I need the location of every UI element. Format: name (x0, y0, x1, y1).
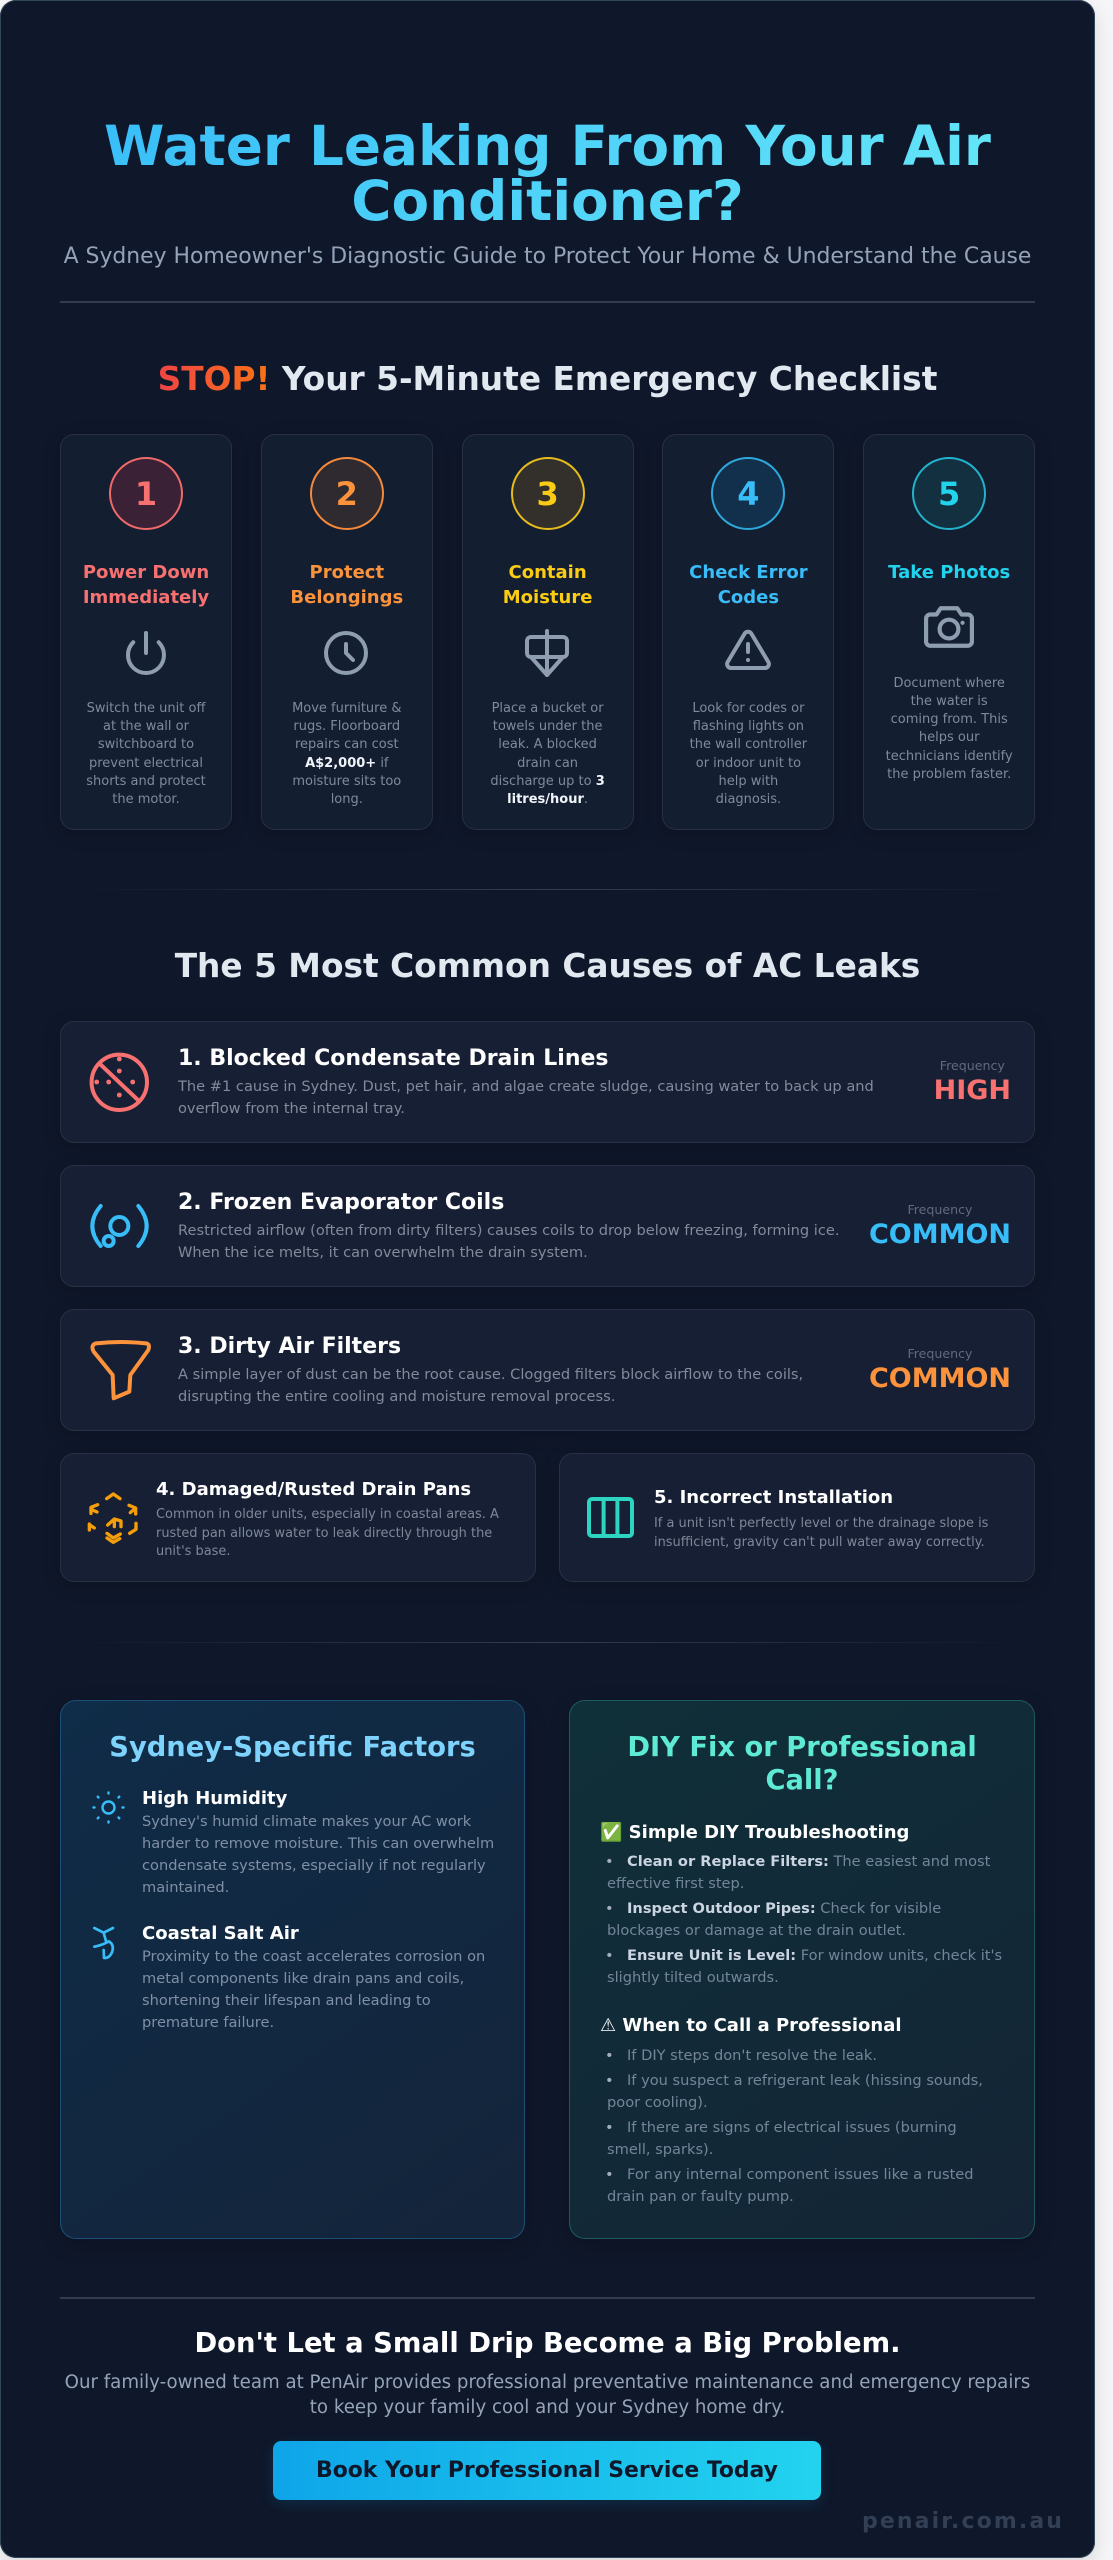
step title: Protect (310, 562, 384, 583)
professional list: • (605, 2072, 614, 2088)
heading: common causes: The 5 Most Common Causes of AC Leaks (175, 947, 920, 985)
cause text (654, 1516, 988, 1550)
step text: diagnosis. (716, 792, 781, 807)
cause text: Restricted airflow (often from dirty filters) causes coils to drop below freezing, forming ice. (178, 1222, 839, 1239)
step text: switchboard to (98, 737, 194, 752)
icon: clock (324, 631, 368, 675)
factor text: condensate systems, especially if not regularly (142, 1857, 486, 1874)
frequency badge (934, 1058, 1011, 1106)
cause text (156, 1507, 499, 1559)
title: Water Leaking From Your Air (104, 114, 991, 178)
step text: long. (331, 792, 363, 807)
step text: the wall controller (690, 737, 807, 752)
panel: Sydney-specific factors (60, 1700, 525, 2239)
icon: warning triangle (725, 630, 771, 670)
step text: leak. A blocked (498, 737, 597, 752)
step text: Place a bucket or (492, 701, 604, 716)
panel: step 2 protect belongings (261, 434, 433, 830)
factor text (142, 1948, 485, 2031)
subtitle: A Sydney Homeowner's Diagnostic Guide to Protect Your Home & Understand the Cause (64, 244, 1031, 269)
panel heading: Sydney-Specific Factors (109, 1732, 476, 1763)
step text: prevent electrical (89, 756, 203, 771)
frequency badge: COMMON (869, 1219, 1011, 1250)
panel: cause 4 drain pans (60, 1453, 536, 1582)
step text: Switch the unit off (87, 701, 205, 716)
panel: step 4 check error codes (662, 434, 834, 830)
panel: step 5 take photos (863, 434, 1035, 830)
step text (490, 701, 605, 807)
icon: camera (924, 606, 974, 648)
factor text: Sydney's humid climate makes your AC work (142, 1813, 471, 1830)
frequency badge: HIGH (934, 1075, 1011, 1106)
frequency badge (869, 1346, 1011, 1394)
cause text (178, 1366, 803, 1405)
step text (690, 701, 808, 807)
cause text: The #1 cause in Sydney. Dust, pet hair, and algae create sludge, causing water to back up and (178, 1078, 874, 1095)
cause title: 5. Incorrect Installation (654, 1487, 893, 1508)
panel: cause 5 incorrect installation (559, 1453, 1035, 1582)
icon: columns (587, 1497, 634, 1538)
step text: Move furniture & (292, 701, 402, 716)
professional list: • (605, 2118, 614, 2136)
DIY subheading: ✅ Simple DIY Troubleshooting (600, 1822, 909, 1842)
step text: the problem faster. (887, 767, 1011, 782)
icon: power (126, 631, 166, 675)
footer text: to keep your family cool and your Sydney home dry. (310, 2397, 785, 2418)
step text (886, 676, 1013, 782)
step title: Immediately (83, 587, 209, 608)
professional list (605, 2046, 983, 2204)
step number 3 (511, 457, 585, 530)
DIY list: Inspect Outdoor Pipes: Check for visible (627, 1900, 941, 1917)
icon: rusted pan dashed hexagon (88, 1492, 138, 1544)
step text: coming from. This (891, 712, 1008, 727)
step title: Check Error (689, 562, 808, 583)
panel: cause 3 dirty filters (60, 1309, 1035, 1431)
step title (290, 562, 403, 608)
step title: Codes (718, 587, 779, 608)
step text: discharge up to 3 (490, 774, 605, 789)
step text: flashing lights on (693, 719, 804, 734)
professional list: • (605, 2046, 614, 2064)
factor text: harder to remove moisture. This can overwhelm (142, 1835, 494, 1852)
step number 5: 5 (938, 474, 960, 512)
step text: moisture sits too (292, 774, 401, 789)
step number 2: 2 (336, 474, 358, 512)
factor text (142, 1813, 494, 1896)
step text: helps our (919, 730, 979, 745)
heading: emergency checklist: STOP! Your 5-Minute Emergency Checklist (158, 360, 937, 398)
factor text: metal components like drain pans and coils, (142, 1970, 464, 1987)
professional list: smell, sparks). (607, 2140, 713, 2158)
step text: Look for codes or (692, 701, 804, 716)
factor text: maintained. (142, 1879, 229, 1896)
factor text: premature failure. (142, 2014, 274, 2031)
cause text: If a unit isn't perfectly level or the drainage slope is (654, 1516, 988, 1531)
DIY list: • (605, 1947, 614, 1964)
footer text: Our family-owned team at PenAir provides professional preventative maintenance and emergency repairs (65, 2372, 1030, 2392)
step text: litres/hour. (507, 792, 588, 807)
cause text: Common in older units, especially in coastal areas. A (156, 1507, 499, 1522)
step number 3: 3 (536, 474, 559, 512)
professional subheading: ⚠ When to Call a Professional (600, 2015, 902, 2036)
step text: repairs can cost (295, 737, 399, 752)
professional list: • (605, 2166, 614, 2182)
step number 1 (109, 457, 183, 530)
panel: step 1 power down (60, 434, 232, 830)
step title: Take Photos (888, 562, 1010, 583)
frequency badge: Frequency (907, 1346, 972, 1361)
step text: Document where (893, 676, 1005, 691)
panel: DIY fix or professional call (569, 1700, 1035, 2239)
cause text: disrupting the entire cooling and moisture removal process. (178, 1388, 615, 1405)
professional list: If you suspect a refrigerant leak (hissing sounds, (627, 2072, 983, 2088)
DIY list: blockages or damage at the drain outlet. (607, 1922, 906, 1939)
step text: shorts and protect (86, 774, 206, 789)
title (100, 118, 995, 228)
step title (83, 562, 209, 608)
step title: Contain (509, 562, 587, 583)
watermark url: penair.com.au (862, 2509, 1064, 2534)
step text (86, 701, 206, 807)
cause title: 3. Dirty Air Filters (178, 1334, 401, 1359)
cause text: overflow from the internal tray. (178, 1100, 405, 1117)
frequency badge: Frequency (940, 1058, 1005, 1073)
icon: frozen coil (90, 1204, 149, 1248)
step title: Moisture (503, 587, 592, 608)
factor title: High Humidity (142, 1788, 287, 1809)
professional list: poor cooling). (607, 2094, 708, 2110)
step text: help with (718, 774, 778, 789)
panel heading: DIY Fix or Professional (627, 1732, 977, 1763)
step text (292, 701, 402, 807)
cause text: A simple layer of dust can be the root cause. Clogged filters block airflow to the coils, (178, 1366, 803, 1383)
call to action button: Book Your Professional Service Today (316, 2458, 778, 2483)
factor text: shortening their lifespan and leading to (142, 1992, 431, 2009)
step text: the water is (911, 694, 988, 709)
professional list: If there are signs of electrical issues (burning (627, 2118, 957, 2136)
DIY list: • (605, 1853, 614, 1870)
icon: sun (92, 1791, 125, 1824)
professional list: For any internal component issues like a rusted (627, 2166, 974, 2182)
DIY list: slightly tilted outwards. (607, 1969, 779, 1986)
step title: Belongings (290, 587, 403, 608)
professional list: drain pan or faulty pump. (607, 2188, 794, 2204)
panel heading (627, 1732, 977, 1796)
step text: or indoor unit to (696, 756, 801, 771)
icon: bucket shield (525, 629, 569, 677)
step text: A$2,000+ if (305, 756, 389, 771)
cause text: unit's base. (156, 1544, 230, 1559)
cause title: 4. Damaged/Rusted Drain Pans (156, 1479, 471, 1500)
panel heading: Call? (765, 1765, 838, 1796)
step number 4: 4 (737, 474, 760, 512)
panel: step 3 contain moisture (462, 434, 634, 830)
step title: Power Down (83, 562, 209, 583)
DIY list (605, 1853, 1002, 1986)
cause text (178, 1222, 839, 1261)
footer heading: Don't Let a Small Drip Become a Big Problem. (194, 2328, 901, 2359)
step text: drain can (517, 756, 578, 771)
factor title: Coastal Salt Air (142, 1923, 299, 1944)
title: Conditioner? (351, 168, 744, 232)
cause text: insufficient, gravity can't pull water away correctly. (654, 1535, 985, 1550)
DIY list: • (605, 1900, 614, 1917)
step text: towels under the (493, 719, 602, 734)
step text: the motor. (112, 792, 180, 807)
panel: cause 1 blocked drain lines (60, 1021, 1035, 1143)
step number 5 (912, 457, 986, 530)
step title (503, 562, 592, 608)
professional list: If DIY steps don't resolve the leak. (627, 2046, 877, 2064)
step text: at the wall or (103, 719, 189, 734)
step text: technicians identify (886, 749, 1013, 764)
icon: funnel filter (90, 1340, 151, 1400)
frequency badge (869, 1202, 1011, 1250)
cause text (178, 1078, 874, 1117)
DIY list: Clean or Replace Filters: The easiest and most (627, 1853, 990, 1870)
step number 2 (310, 457, 384, 530)
footer text (65, 2372, 1030, 2418)
cause title: 2. Frozen Evaporator Coils (178, 1190, 504, 1215)
step number 4 (711, 457, 785, 530)
cause title: 1. Blocked Condensate Drain Lines (178, 1046, 609, 1071)
step text: rugs. Floorboard (293, 719, 400, 734)
frequency badge: Frequency (907, 1202, 972, 1217)
call to action button (273, 2441, 821, 2500)
panel: cause 2 frozen coils (60, 1165, 1035, 1287)
cause text: When the ice melts, it can overwhelm the drain system. (178, 1244, 588, 1261)
frequency badge: COMMON (869, 1363, 1011, 1394)
factor text: Proximity to the coast accelerates corrosion on (142, 1948, 485, 1965)
step number 1: 1 (135, 474, 157, 512)
icon: blocked circle (90, 1052, 149, 1112)
step title (689, 562, 808, 608)
icon: salt air (93, 1926, 114, 1960)
cause text: rusted pan allows water to leak directly through the (156, 1526, 492, 1541)
DIY list: Ensure Unit is Level: For window units, check it's (627, 1947, 1002, 1964)
DIY list: effective first step. (607, 1875, 744, 1892)
